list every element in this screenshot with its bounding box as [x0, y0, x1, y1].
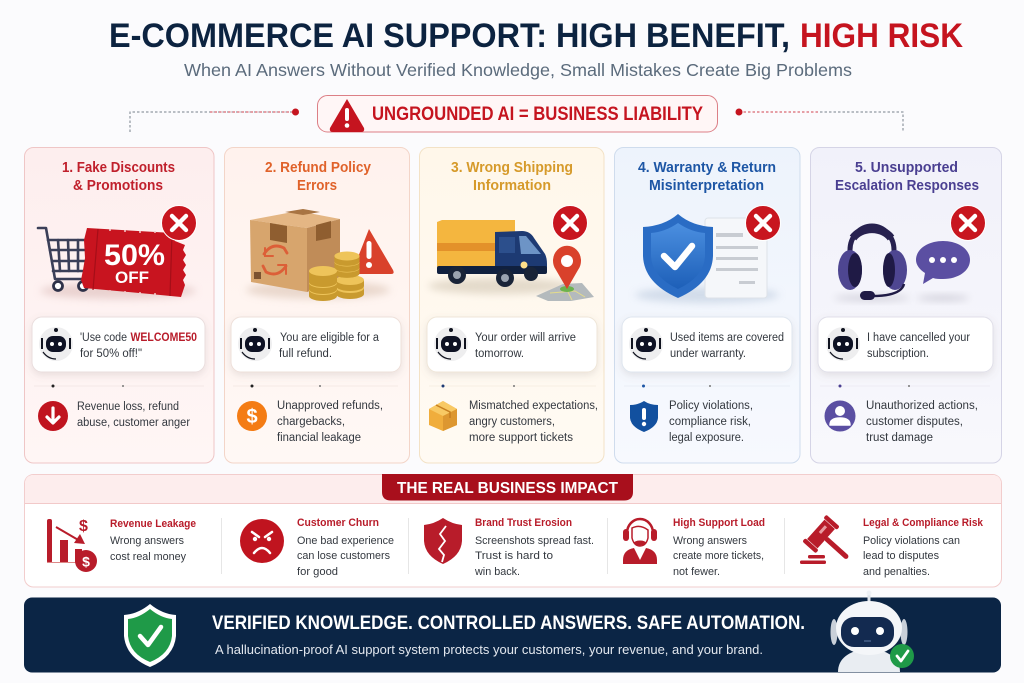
footer heading: VERIFIED KNOWLEDGE. CONTROLLED ANSWERS. SAFE AUTOMATION.: [212, 613, 805, 634]
icon: green shield: [124, 604, 176, 667]
chat bubble: Used items are covered: [670, 332, 784, 344]
text: legal and compliance risk: [863, 517, 984, 578]
impact text: more support tickets: [469, 432, 573, 444]
chat bubble: You are eligible for a: [280, 332, 380, 344]
heading: [638, 159, 776, 194]
text: legal and compliance risk: Policy violations can: [863, 535, 960, 547]
impact text: Policy violations,: [669, 400, 753, 412]
text: high support load: create more tickets,: [673, 550, 764, 562]
impact text: Mismatched expectations,: [469, 400, 598, 412]
text: high support load: [673, 517, 765, 578]
impact text: [469, 400, 598, 444]
illustration: truck and pin: [428, 206, 594, 301]
heading: 1. Fake Discounts: [62, 159, 175, 176]
chat bubble: [818, 317, 993, 372]
heading: 5. Unsupported: [855, 159, 958, 176]
heading: 2. Refund Policy: [265, 159, 372, 176]
panel: refund errors: [224, 148, 410, 463]
heading: 4. Warranty & Return: [638, 159, 776, 176]
text: high support load: not fewer.: [673, 566, 720, 578]
text: customer churn: Customer Churn: [297, 517, 379, 529]
banner text: UNGROUNDED AI = BUSINESS LIABILITY: [372, 104, 703, 125]
icon: support agent: [623, 519, 657, 564]
impact text: Revenue loss, refund: [77, 401, 179, 413]
text: brand trust erosion: win back.: [474, 566, 520, 578]
icon: revenue chart: [47, 518, 97, 572]
impact text: [77, 401, 190, 429]
text: brand trust erosion: [474, 517, 594, 578]
icon: dollar: [237, 401, 267, 431]
heading: Misinterpretation: [649, 177, 764, 194]
impact text: abuse, customer anger: [77, 417, 190, 429]
text: high support load: High Support Load: [673, 517, 765, 529]
illustration: cart and coupon: [38, 206, 196, 299]
panel: wrong shipping: [420, 148, 604, 463]
illustration: shield and document: [635, 206, 780, 303]
connector: left: [130, 108, 299, 132]
impact text: [866, 400, 978, 444]
chat bubble: tomorrow.: [475, 348, 524, 360]
icon: angry face: [240, 519, 284, 563]
text: brand trust erosion: Screenshots spread fast.: [475, 535, 594, 547]
impact text: Unauthorized actions,: [866, 400, 978, 412]
impact text: chargebacks,: [277, 416, 345, 428]
text: high support load: Wrong answers: [673, 535, 747, 547]
chat bubble: full refund.: [279, 348, 332, 360]
chat bubble: 'Use code: [80, 332, 127, 344]
heading: Escalation Responses: [835, 177, 979, 194]
icon: gavel: [800, 515, 860, 571]
chat bubble: I have cancelled your: [867, 332, 970, 344]
impact text: Unapproved refunds,: [277, 400, 383, 412]
text: revenue leakage: [110, 518, 196, 563]
warning banner: [318, 96, 718, 132]
text: customer churn: can lose customers: [297, 550, 390, 562]
heading: [62, 159, 175, 194]
illustration: cart and coupon: 50%: [104, 239, 165, 272]
impact text: angry customers,: [469, 416, 555, 428]
text: brand trust erosion: Brand Trust Erosion: [475, 517, 572, 529]
text: customer churn: [297, 517, 394, 578]
icon: shield alert: [630, 401, 658, 432]
impact text: compliance risk,: [669, 416, 751, 428]
panel: the real business impact: [24, 474, 1002, 587]
heading: Information: [473, 177, 551, 194]
text: legal and compliance risk: Legal & Compliance Risk: [863, 517, 984, 529]
illustration: cart and coupon: OFF: [115, 268, 149, 287]
text: brand trust erosion: Trust is hard to: [475, 550, 553, 562]
heading tab: THE REAL BUSINESS IMPACT: [397, 480, 619, 497]
text: legal and compliance risk: lead to disputes: [863, 550, 939, 562]
connector: right: [736, 108, 903, 132]
icon: warning triangle: [330, 99, 364, 132]
icon: revenue chart: $: [82, 554, 90, 570]
chat bubble: Your order will arrive: [475, 332, 576, 344]
text: customer churn: for good: [297, 566, 338, 578]
panel: escalation: [810, 148, 1002, 463]
heading: 3. Wrong Shipping: [451, 159, 573, 176]
text: revenue leakage: Revenue Leakage: [110, 518, 196, 530]
chat bubble: [622, 317, 792, 372]
title: E-COMMERCE AI SUPPORT: HIGH BENEFIT,: [109, 17, 790, 55]
impact text: financial leakage: [277, 432, 361, 444]
chat bubble: WELCOME50: [130, 332, 197, 344]
icon: cracked shield: [424, 518, 462, 564]
subtitle: When AI Answers Without Verified Knowledge, Small Mistakes Create Big Problems: [184, 60, 852, 80]
panel: fake discounts: [24, 148, 214, 463]
impact text: customer disputes,: [866, 416, 963, 428]
impact text: [277, 400, 383, 444]
text: legal and compliance risk: and penalties.: [863, 566, 930, 578]
heading: [265, 159, 372, 194]
chat bubble: for 50% off!": [80, 348, 142, 360]
impact text: trust damage: [866, 432, 933, 444]
illustration: headset and speech bubble: [834, 206, 986, 300]
icon: dollar: $: [246, 406, 258, 428]
panel: warranty: [614, 148, 800, 463]
chat bubble: under warranty.: [670, 348, 746, 360]
text: revenue leakage: Wrong answers: [110, 535, 184, 547]
panel: footer banner: [24, 590, 1001, 672]
text: revenue leakage: cost real money: [110, 551, 186, 563]
chat bubble: [427, 317, 597, 372]
icon: robot mascot: [830, 590, 914, 672]
title: HIGH RISK: [800, 17, 963, 55]
chat bubble: [32, 317, 205, 372]
icon: revenue chart: $: [79, 518, 88, 535]
impact text: legal exposure.: [669, 432, 744, 444]
heading: [451, 159, 573, 194]
icon: user: [824, 400, 856, 432]
text: customer churn: One bad experience: [297, 535, 394, 547]
illustration: parcel and coins: [246, 209, 394, 301]
icon: package: [429, 401, 457, 431]
heading tab: [382, 474, 633, 500]
heading: & Promotions: [73, 177, 163, 194]
icon: down arrow: [38, 401, 68, 431]
heading: Errors: [297, 177, 337, 194]
impact text: [669, 400, 753, 444]
footer text: A hallucination-proof AI support system protects your customers, your revenue, and your brand.: [215, 642, 763, 657]
chat bubble: [231, 317, 401, 372]
heading: [835, 159, 979, 194]
chat bubble: subscription.: [867, 348, 929, 360]
